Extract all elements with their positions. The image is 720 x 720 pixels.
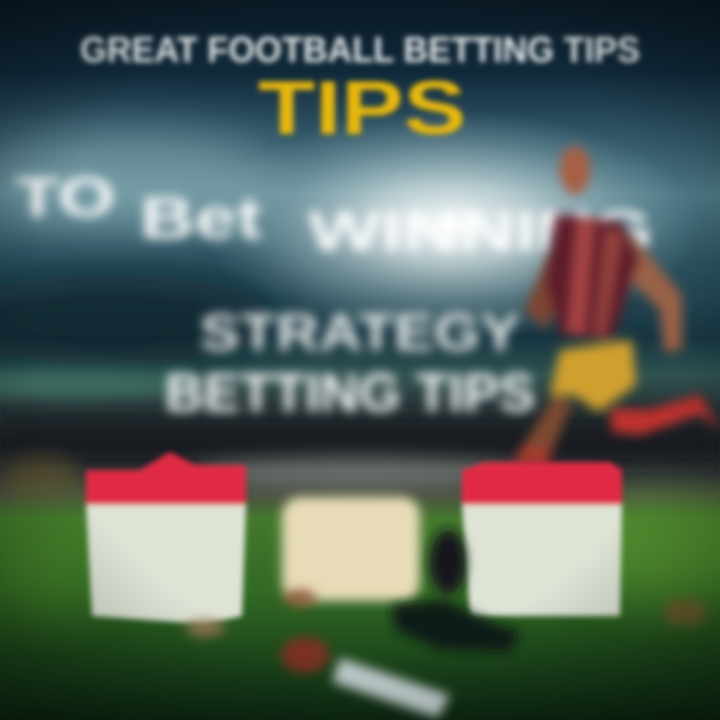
large white headline: Bet bbox=[140, 186, 262, 251]
player jersey bbox=[545, 214, 640, 340]
large white headline: TO bbox=[15, 165, 115, 228]
large white headline: WINNING bbox=[308, 199, 653, 262]
large white headline bbox=[15, 165, 653, 262]
white subheading: STRATEGY bbox=[200, 304, 520, 362]
card: right bbox=[462, 462, 622, 616]
icon: white ticket bbox=[332, 658, 450, 718]
white subheading bbox=[165, 304, 535, 423]
heading: yellow tips: TIPS bbox=[258, 66, 466, 151]
player head bbox=[560, 146, 590, 194]
card: centre bbox=[282, 497, 420, 601]
icon: football boot bbox=[392, 530, 520, 652]
white subheading: BETTING TIPS bbox=[165, 363, 535, 423]
heading line: GREAT FOOTBALL BETTING TIPS bbox=[80, 29, 640, 70]
football player bbox=[514, 146, 720, 468]
card: left bbox=[86, 452, 246, 624]
player legs bbox=[610, 395, 720, 435]
icon: football bbox=[185, 589, 707, 673]
player shorts bbox=[550, 340, 636, 412]
player arm bbox=[625, 235, 682, 352]
